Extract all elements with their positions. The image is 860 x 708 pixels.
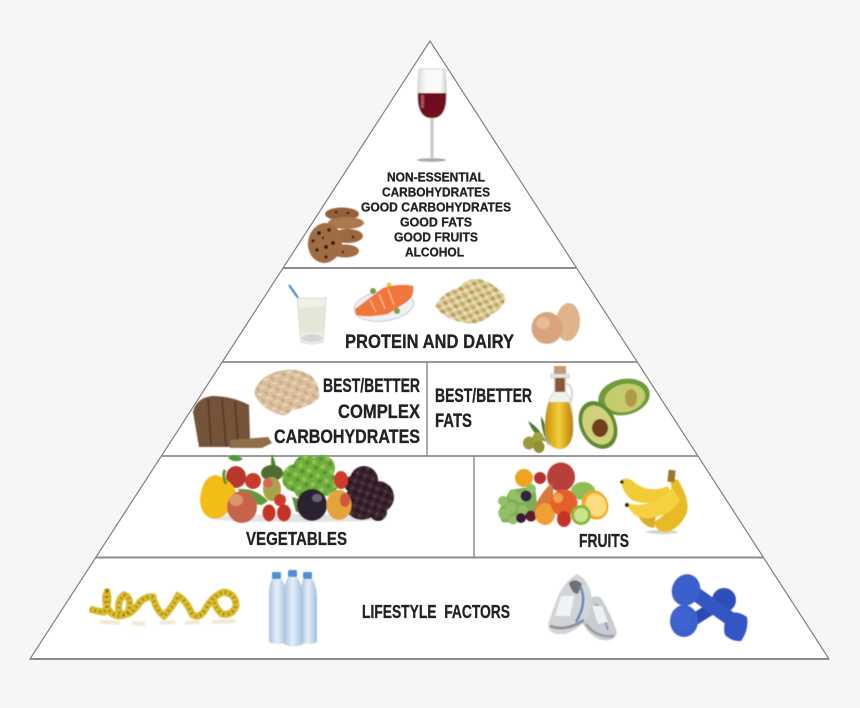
icon: olives — [523, 416, 549, 453]
icon: pile of beans — [435, 279, 505, 324]
panel: lifestyle factors — [90, 570, 747, 646]
icon: measuring tape — [90, 592, 236, 624]
text: best/better complex carbohydrates: CARBOHYDRATES — [274, 427, 420, 448]
panel: best/better fats — [435, 366, 653, 455]
panel: vegetables — [200, 454, 394, 549]
text: non-essential list — [361, 170, 511, 260]
panel: top tier — [305, 69, 511, 265]
text: best/better fats — [435, 386, 532, 432]
label: lifestyle factors: LIFESTYLE FACTORS — [362, 602, 510, 622]
icon: blue dumbbells — [667, 570, 747, 641]
icon: brown rice — [254, 370, 319, 415]
text: best/better complex carbohydrates — [274, 376, 420, 448]
icon: olive oil bottle — [545, 366, 573, 449]
icon: cookies — [305, 208, 364, 265]
icon: eggs — [532, 302, 581, 344]
icon: glass of milk — [289, 285, 326, 344]
panel: protein and dairy — [289, 279, 581, 353]
text: non-essential list: NON-ESSENTIAL — [387, 170, 485, 184]
icon: vegetable group — [200, 454, 394, 523]
icon: wine glass — [417, 69, 446, 162]
icon: avocados — [571, 374, 653, 455]
text: best/better complex carbohydrates: BEST/BETTER — [323, 376, 420, 397]
icon: fruit group — [498, 462, 613, 527]
icon: salmon on a plate — [352, 282, 416, 325]
label: vegetables: VEGETABLES — [246, 528, 347, 549]
icon: bread — [193, 396, 272, 448]
text: non-essential list: ALCOHOL — [405, 244, 464, 260]
text: non-essential list: GOOD FRUITS — [394, 230, 478, 244]
text: non-essential list: GOOD CARBOHYDRATES — [361, 200, 511, 214]
text: non-essential list: CARBOHYDRATES — [382, 184, 490, 200]
icon: bananas — [620, 470, 688, 534]
icon: water bottles — [269, 570, 317, 646]
text: best/better fats: FATS — [435, 411, 472, 432]
panel: complex carbohydrates — [193, 370, 420, 448]
icon: running shoes — [548, 574, 617, 640]
text: non-essential list: GOOD FATS — [400, 214, 472, 230]
label: fruits: FRUITS — [579, 530, 629, 551]
text: best/better fats: BEST/BETTER — [435, 386, 532, 407]
label: protein and dairy: PROTEIN AND DAIRY — [345, 332, 514, 353]
panel: fruits — [498, 462, 688, 551]
text: best/better complex carbohydrates: COMPLEX — [338, 402, 420, 423]
